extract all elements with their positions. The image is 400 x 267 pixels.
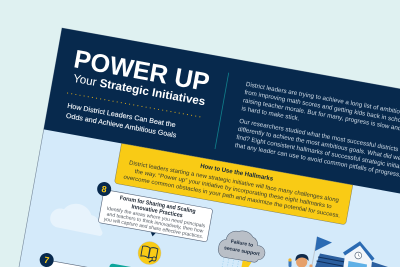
pointer	[150, 232, 156, 237]
panel: hallmark 8 card	[97, 190, 213, 246]
person	[288, 254, 313, 267]
roof stripes	[316, 257, 345, 266]
panel: hallmark 7 card	[38, 260, 106, 267]
tagline: How District Leaders Can Beat the	[67, 103, 176, 129]
panel: teal card	[105, 263, 179, 267]
badge: number 7	[39, 252, 55, 267]
cloud label: Failure to	[230, 239, 254, 249]
tagline: Odds and Achieve Ambitious Goals	[65, 113, 177, 140]
panel: how to use the hallmarks	[114, 143, 353, 225]
icon: pale cloud	[49, 199, 107, 236]
vertical divider	[215, 73, 229, 149]
intro text: that any leader can use to avoid common pitfalls of progress.	[234, 142, 400, 179]
callout body: the way. “Power up” your initiative by incorporating these eight hallmarks to	[134, 169, 332, 210]
school front	[343, 241, 374, 267]
illustration: person with flag and school	[288, 236, 392, 267]
lightning bolt	[240, 261, 252, 267]
card title: Forum for Sharing and Scaling	[119, 195, 196, 215]
rain	[221, 258, 239, 267]
badge: number 8: 8	[101, 184, 107, 195]
panel: header	[44, 28, 400, 221]
cloud label: secure support	[223, 245, 260, 258]
intro text: differently to achieve the most ambitious goals. What did we	[237, 126, 400, 162]
title: POWER UP	[72, 45, 211, 97]
card box	[98, 190, 213, 242]
callout body: overcome common obstacles in your path and maximize the potential for success.	[123, 175, 341, 220]
storm cloud	[217, 227, 268, 264]
icon: open book in yellow circle	[136, 240, 163, 266]
card description: and teachers to think innovatively, then how	[106, 211, 204, 235]
intro text: is hard to make stick.	[241, 105, 300, 123]
subtitle: Your Strategic Initiatives	[72, 73, 206, 108]
school right wing	[370, 261, 392, 267]
header background	[44, 28, 400, 221]
yellow callout box	[114, 143, 353, 225]
callout body: District leaders starting a new strategic initiative will face many challenges along	[129, 160, 339, 204]
badge: number 7: 7	[43, 255, 50, 266]
card description: you will capture and share effective practices.	[103, 216, 204, 240]
dotted rule	[68, 93, 201, 117]
obstacle: failure to secure support cloud	[214, 227, 268, 267]
card title: Innovative Practices	[131, 204, 184, 219]
flag	[312, 236, 332, 267]
school left wing	[314, 254, 345, 267]
card description: Identify the areas where you need principals	[106, 206, 206, 230]
badge: number 8	[96, 181, 112, 197]
callout heading: How to Use the Hallmarks	[200, 163, 274, 183]
